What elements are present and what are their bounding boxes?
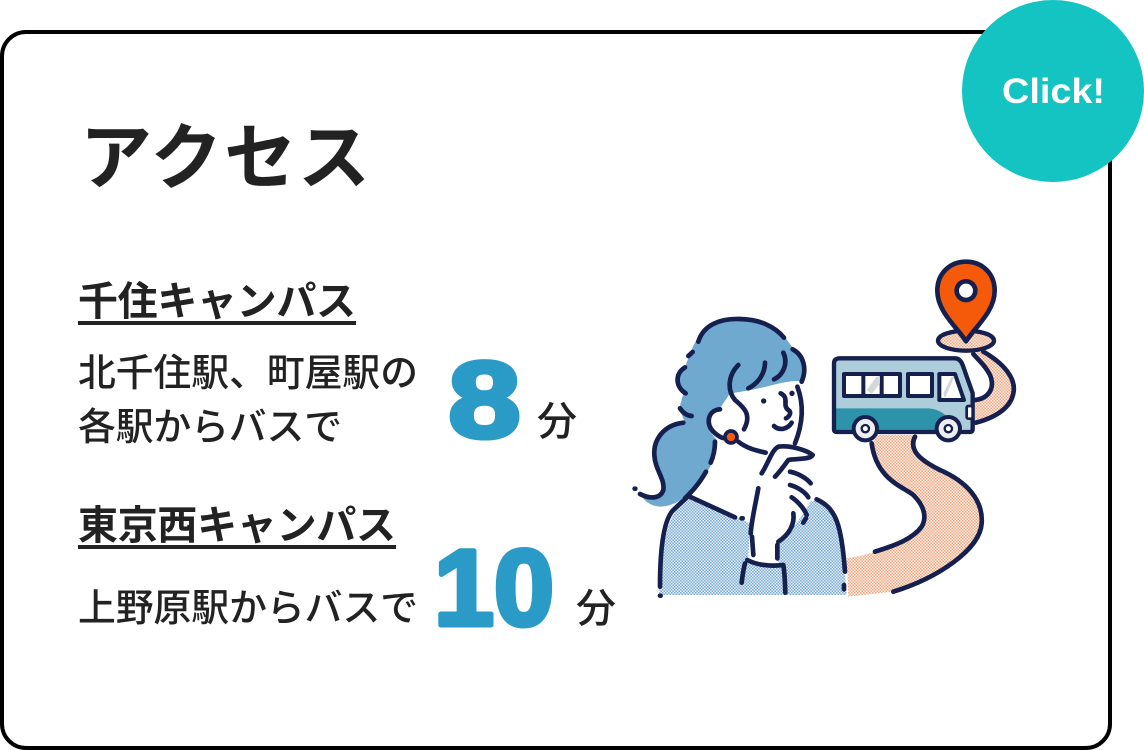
button: Click!: Click! <box>1002 72 1105 111</box>
text: Senju access description: 北千住駅、町屋駅の <box>78 353 418 395</box>
number: 10 minutes <box>434 527 616 648</box>
text: Tokyo Nishi access description: 上野原駅からバスで <box>78 588 418 630</box>
face <box>725 387 802 453</box>
number: 10 minutes: 分 <box>576 587 616 631</box>
number: 8 minutes: 8 <box>448 339 520 460</box>
hand <box>742 446 813 593</box>
road <box>847 350 1014 597</box>
icon: bus <box>834 358 973 440</box>
text: Senju access description <box>78 353 418 449</box>
hair <box>635 319 805 507</box>
text: Senju access description: 各駅からバスで <box>78 407 342 449</box>
title: アクセス <box>80 119 370 199</box>
number: 8 minutes: 分 <box>537 400 577 444</box>
heading: Tokyo Nishi campus: 東京西キャンパス <box>78 504 396 548</box>
number: 8 minutes <box>448 339 577 460</box>
shirt <box>659 496 847 596</box>
number: 10 minutes: 10 <box>434 527 554 648</box>
illustration: woman and bus route <box>635 262 1014 597</box>
icon: map pin <box>937 262 995 351</box>
heading: Senju campus: 千住キャンパス <box>78 280 356 324</box>
button: Click! <box>962 0 1144 182</box>
